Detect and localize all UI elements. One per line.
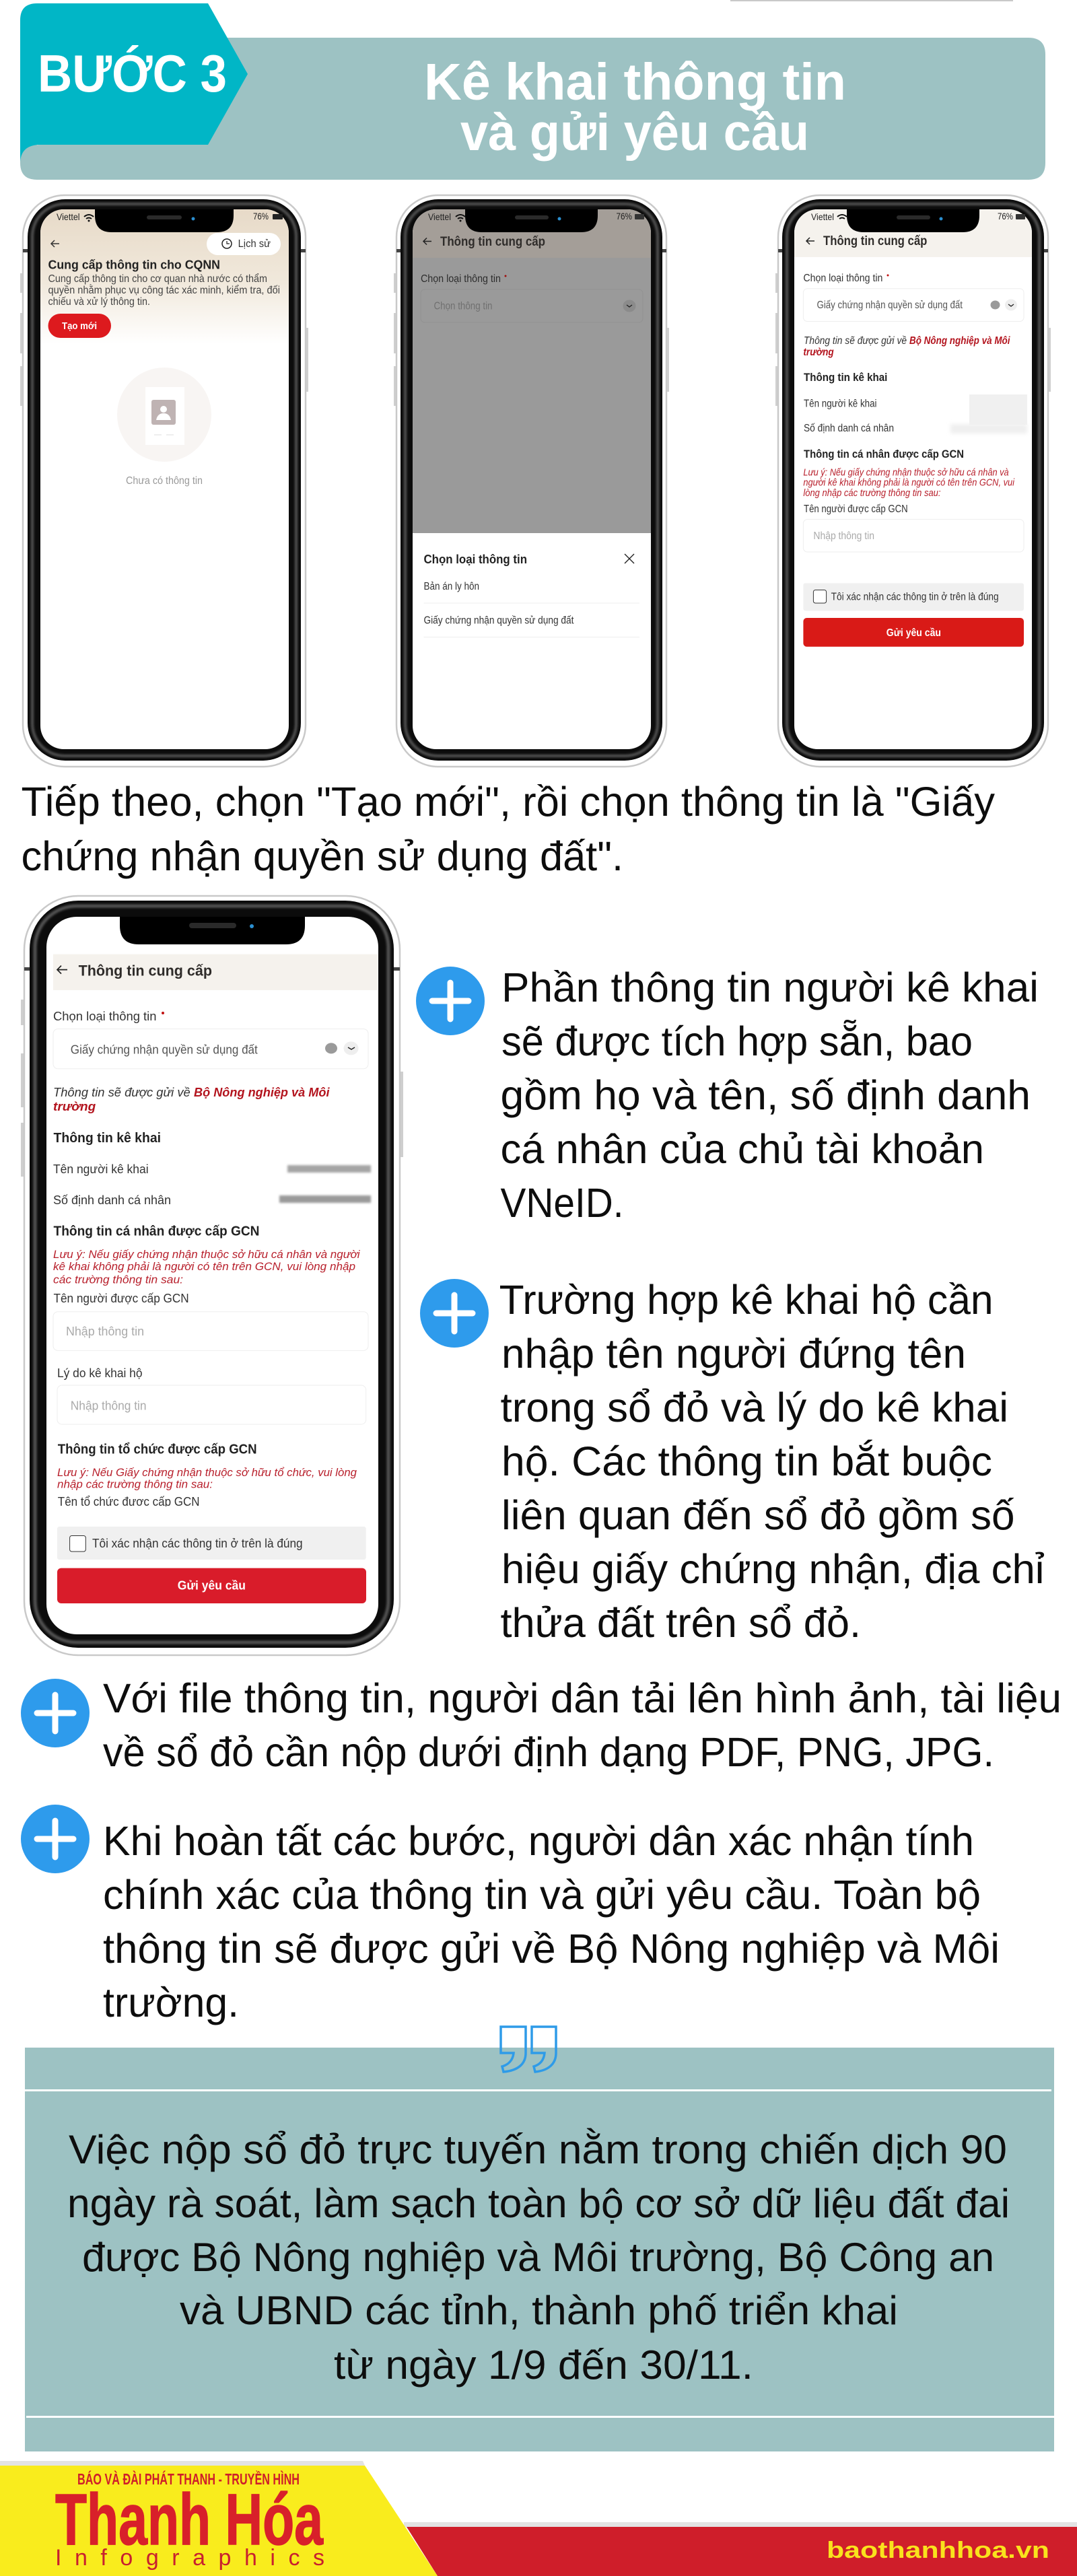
- GCN section: Tên người được cấp GCN: [804, 503, 908, 515]
- header bar: [53, 954, 378, 990]
- dropdown: [803, 273, 1024, 322]
- text block: declarant information: Phần thông tin người kê khai: [501, 965, 1039, 1010]
- confirmation checkbox: [57, 1527, 366, 1560]
- individual GCN section: Nhập thông tin: [71, 1399, 147, 1412]
- individual GCN section: Lưu ý: Nếu giấy chứng nhận thuộc sở hữu cá nhân và người: [53, 1248, 361, 1261]
- declarant info: Thông tin kê khai: [54, 1131, 161, 1146]
- declarant info: Tên người kê khai: [804, 398, 876, 409]
- quote text: và UBND các tỉnh, thành phố triển khai: [180, 2288, 898, 2333]
- title: [424, 53, 846, 162]
- dropdown: [53, 1010, 368, 1069]
- text block: confirmation: [103, 1818, 1000, 2025]
- icon: plus 4: [21, 1805, 90, 1873]
- declarant info: Số định danh cá nhân: [53, 1193, 171, 1207]
- panel: quote: [25, 2027, 1054, 2451]
- logo: Thanh Hóa: Thanh Hóa: [55, 2478, 324, 2560]
- icon: plus 2: [420, 1279, 489, 1348]
- status bar: [57, 211, 283, 222]
- phone 4: large form: [21, 896, 403, 1655]
- heading and description: Cung cấp thông tin cho CQNN: [48, 258, 220, 272]
- submit button: [57, 1568, 366, 1603]
- organisation GCN section: Lưu ý: Nếu Giấy chứng nhận thuộc sở hữu tổ chức, vui lòng: [57, 1466, 357, 1479]
- organisation GCN section: Tên tổ chức được cấp GCN: [58, 1495, 200, 1508]
- quote text: được Bộ Nông nghiệp và Môi trường, Bộ Công an: [82, 2235, 994, 2280]
- individual GCN section: kê khai không phải là người có tên trên GCN, vui lòng nhập: [53, 1260, 355, 1273]
- phone 2: Chọn loại thông tin: [394, 195, 669, 767]
- step tag: BƯỚC 3: [20, 3, 248, 180]
- individual GCN section: Lý do kê khai hộ: [57, 1366, 143, 1380]
- recipient note: [53, 1086, 330, 1113]
- logo: Infographics: Infographics: [55, 2545, 324, 2571]
- organisation GCN section: nhập các trường thông tin sau:: [57, 1478, 213, 1490]
- GCN section: Thông tin cá nhân được cấp GCN: [804, 448, 964, 460]
- icon: quotation mark: [501, 2027, 556, 2072]
- declarant info: Tên người kê khai: [53, 1162, 149, 1176]
- history button: [207, 233, 281, 255]
- individual GCN section: Thông tin cá nhân được cấp GCN: [54, 1224, 260, 1239]
- quote text: ngày rà soát, làm sạch toàn bộ cơ sở dữ liệu đất đai: [67, 2181, 1010, 2226]
- submit button: Gửi yêu cầu: [178, 1578, 246, 1592]
- text block: confirmation: chính xác của thông tin và gửi yêu cầu. Toàn bộ: [103, 1872, 981, 1918]
- text block: filing on behalf: hộ. Các thông tin bắt buộc: [501, 1438, 992, 1484]
- dropdown: Chọn loại thông tin: [53, 1010, 156, 1023]
- text block: declarant information: sẽ được tích hợp sẵn, bao: [501, 1018, 973, 1064]
- dropdown: Chọn loại thông tin: [803, 273, 882, 284]
- title: Kê khai thông tin: [424, 53, 846, 111]
- organisation GCN section: Thông tin tổ chức được cấp GCN: [58, 1442, 257, 1457]
- status bar: [811, 211, 1025, 222]
- screen title: Thông tin cung cấp: [823, 234, 927, 248]
- GCN section: lòng nhập các trường thông tin sau:: [803, 487, 941, 499]
- icon: back arrow: [806, 238, 814, 244]
- organisation GCN section: [57, 1442, 357, 1508]
- Tạo mới button: [48, 314, 111, 338]
- GCN section: người kê khai không phải là người có tên trên GCN, vui: [803, 477, 1015, 489]
- icon: empty state: [117, 368, 211, 462]
- status bar: Viettel: [428, 211, 451, 222]
- dropdown: [421, 273, 643, 322]
- header bar: Thông tin cung cấp: [79, 962, 212, 979]
- GCN section: Nhập thông tin: [813, 530, 874, 542]
- submit button: Gửi yêu cầu: [887, 627, 941, 639]
- recipient note: Thông tin sẽ được gửi về: [53, 1086, 190, 1099]
- phone 1: Cung cấp thông tin: [20, 195, 308, 767]
- confirmation checkbox: [803, 583, 1024, 611]
- recipient note: [803, 335, 1010, 358]
- status bar: Viettel: [811, 211, 834, 222]
- declarant info: Thông tin kê khai: [804, 371, 887, 384]
- GCN section: [803, 448, 1024, 552]
- icon: plus 1: [416, 967, 485, 1035]
- website: baothanhhoa.vn: [827, 2538, 1049, 2563]
- footer: [0, 2461, 1077, 2576]
- dropdown: Chọn loại thông tin: [421, 273, 501, 285]
- individual GCN section: các trường thông tin sau:: [53, 1274, 183, 1286]
- confirmation checkbox: Tôi xác nhận các thông tin ở trên là đúng: [92, 1537, 303, 1550]
- recipient note: trường: [803, 347, 834, 358]
- text block: file upload: về sổ đỏ cần nộp dưới định dạng PDF, PNG, JPG.: [103, 1729, 994, 1775]
- GCN section: Lưu ý: Nếu giấy chứng nhận thuộc sở hữu cá nhân và: [803, 467, 1009, 478]
- bottom sheet: Giấy chứng nhận quyền sử dụng đất: [424, 615, 574, 626]
- text block: file upload: Với file thông tin, người dân tải lên hình ảnh, tài liệu: [103, 1675, 1062, 1721]
- title: và gửi yêu cầu: [460, 104, 809, 162]
- status bar: Viettel: [57, 211, 80, 222]
- step tag: BƯỚC 3: BƯỚC 3: [38, 44, 227, 103]
- text block: confirmation: thông tin sẽ được gửi về Bộ Nông nghiệp và Môi: [103, 1926, 1000, 1972]
- history button: Lịch sử: [238, 238, 271, 250]
- individual GCN section: [53, 1224, 368, 1424]
- declarant info: [804, 371, 1027, 434]
- recipient note: trường: [53, 1100, 96, 1113]
- declarant info: Số định danh cá nhân: [804, 423, 894, 434]
- text block: filing on behalf: nhập tên người đứng tên: [501, 1331, 966, 1377]
- phone 3: Thông tin cung cấp: [775, 195, 1051, 767]
- status bar: [428, 211, 644, 222]
- instruction text: [22, 779, 995, 879]
- heading and description: Cung cấp thông tin cho cơ quan nhà nước có thẩm: [48, 273, 267, 285]
- recipient note: Thông tin sẽ được gửi về: [804, 335, 907, 347]
- status bar: 76%: [253, 211, 269, 221]
- quote text: Việc nộp sổ đỏ trực tuyến nằm trong chiến dịch 90: [69, 2127, 1007, 2172]
- instruction text: Tiếp theo, chọn "Tạo mới", rồi chọn thông tin là "Giấy: [22, 779, 995, 825]
- quote text: [67, 2127, 1010, 2388]
- status bar: 76%: [998, 211, 1013, 221]
- Tạo mới button: Tạo mới: [62, 320, 97, 332]
- confirmation checkbox: Tôi xác nhận các thông tin ở trên là đúng: [831, 592, 999, 603]
- individual GCN section: Nhập thông tin: [66, 1325, 144, 1338]
- heading and description: chiếu và xử lý thông tin.: [48, 296, 150, 308]
- dropdown: Giấy chứng nhận quyền sử dụng đất: [817, 300, 963, 311]
- text block: filing on behalf: hiệu giấy chứng nhận, địa chỉ: [501, 1546, 1045, 1592]
- recipient note: Bộ Nông nghiệp và Môi: [194, 1086, 330, 1099]
- instruction text: chứng nhận quyền sử dụng đất".: [22, 833, 623, 879]
- text block: confirmation: trường.: [103, 1980, 239, 2025]
- text block: declarant information: gồm họ và tên, số định danh: [501, 1072, 1031, 1118]
- heading and description: [48, 258, 280, 308]
- text block: filing on behalf: thửa đất trên sổ đỏ.: [501, 1600, 861, 1646]
- text block: filing on behalf: Trường hợp kê khai hộ cần: [499, 1277, 994, 1323]
- header banner: [20, 3, 1045, 180]
- text block: declarant information: cá nhân của chủ tài khoản: [501, 1126, 984, 1172]
- submit button: [803, 618, 1024, 647]
- empty state label: Chưa có thông tin: [126, 475, 203, 487]
- icon: plus 3: [21, 1679, 90, 1747]
- text block: declarant information: VNeID.: [501, 1180, 623, 1226]
- status bar: 76%: [617, 211, 632, 221]
- declarant info: [53, 1131, 371, 1207]
- text block: file upload: [103, 1675, 1062, 1775]
- text block: declarant information: [501, 965, 1039, 1226]
- heading and description: quyền nhằm phục vụ công tác xác minh, kiểm tra, đối: [48, 285, 280, 296]
- bottom sheet: Bản án ly hôn: [424, 581, 479, 592]
- dropdown: Chọn thông tin: [433, 301, 493, 312]
- bottom sheet: Chọn loại thông tin: [424, 553, 527, 566]
- recipient note: Bộ Nông nghiệp và Môi: [909, 335, 1010, 347]
- bottom sheet: [424, 553, 639, 637]
- dropdown: Giấy chứng nhận quyền sử dụng đất: [71, 1043, 258, 1057]
- publisher line: BÁO VÀ ĐÀI PHÁT THANH - TRUYỀN HÌNH: [77, 2470, 300, 2488]
- quote text: từ ngày 1/9 đến 30/11.: [334, 2342, 753, 2388]
- icon: back arrow: [423, 238, 431, 245]
- text block: filing on behalf: trong sổ đỏ và lý do kê khai: [501, 1385, 1008, 1430]
- text block: filing on behalf: [499, 1277, 1045, 1646]
- screen title: Thông tin cung cấp: [440, 235, 545, 249]
- individual GCN section: Tên người được cấp GCN: [54, 1292, 189, 1305]
- text block: confirmation: Khi hoàn tất các bước, người dân xác nhận tính: [103, 1818, 974, 1864]
- text block: filing on behalf: liên quan đến sổ đỏ gồm số: [501, 1492, 1015, 1538]
- icon: back arrow: [51, 240, 59, 247]
